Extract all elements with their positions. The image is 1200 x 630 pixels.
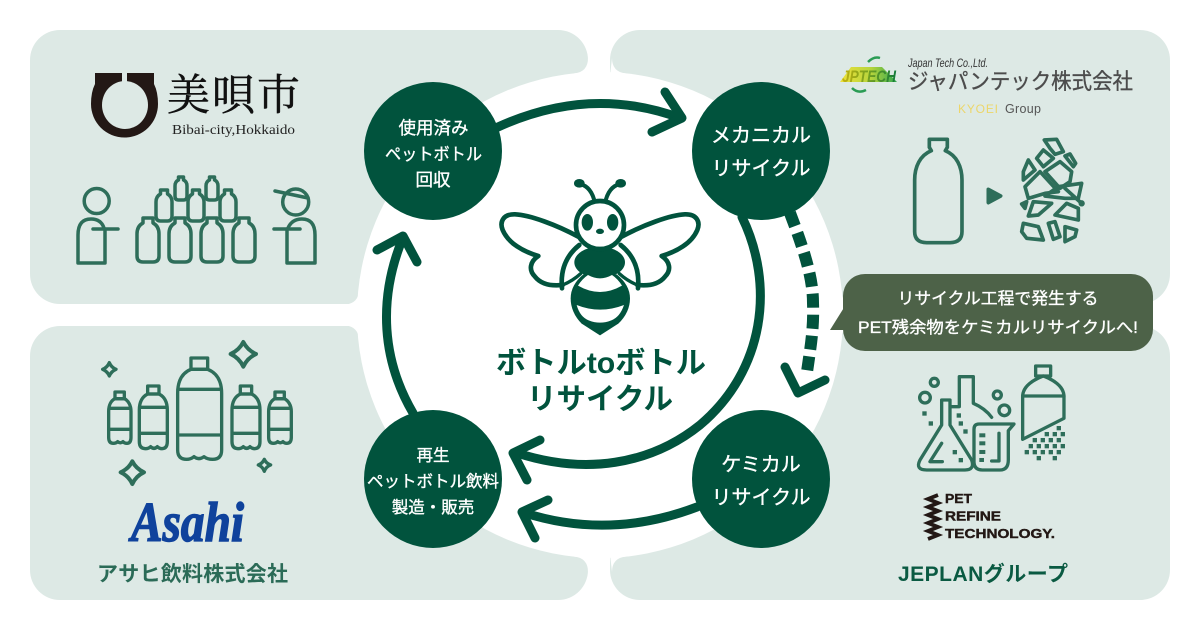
- icon: pellets: [1025, 426, 1065, 460]
- icon: bubbles: [920, 378, 1010, 416]
- icon: collector with cap: [274, 189, 315, 263]
- icon: round flask: [952, 377, 992, 417]
- node: chemical recycling: リサイクル: [712, 486, 810, 509]
- node: chemical recycling: ケミカル: [721, 454, 801, 476]
- icon: beaker: [974, 424, 1014, 470]
- bee thorax and arms: [562, 245, 638, 288]
- node: used bottle collection: [364, 82, 502, 220]
- panel: Bibai city: [30, 30, 588, 304]
- bee antennae: [576, 181, 624, 203]
- callout: PET residue to chemical recycling: リサイクル工程で発生する: [898, 289, 1098, 308]
- arrow: mechanical recycling to resale: [513, 217, 760, 480]
- Japan Tech logo: Japan Tech Co.,Ltd.: [907, 56, 988, 70]
- icon: medium bottle left: [139, 386, 167, 449]
- white central circle: [346, 58, 854, 572]
- company name: Asahi Soft Drinks: アサヒ飲料株式会社: [97, 563, 288, 586]
- icon: small bottle right: [269, 392, 291, 443]
- node: recycled bottle manufacture and sale: 製造・販売: [392, 498, 474, 517]
- Japan Tech logo: [840, 56, 1133, 116]
- arrow: chemical recycling to resale: [522, 500, 697, 538]
- icon: dots in flasks: [922, 411, 985, 462]
- Bibai city logo: 美唄市: [167, 62, 300, 123]
- icon: bottle: [915, 139, 962, 243]
- Japan Tech logo: Group: [1005, 102, 1041, 116]
- Asahi logo: Asahi: [128, 492, 244, 554]
- node: used bottle collection: 回収: [416, 170, 451, 190]
- icon: bottle turning to pellets: [1023, 366, 1064, 439]
- arrow: dashed to chemical recycling: [785, 213, 825, 393]
- Japan Tech logo: ジャパンテック株式会社: [908, 69, 1133, 94]
- icon: bottle to flakes: [915, 139, 1083, 243]
- icon: people collecting bottles: [78, 177, 315, 263]
- bee head: [576, 201, 624, 249]
- Bibai city logo: Bibai-city,Hokkaido: [172, 122, 295, 137]
- node: mechanical recycling: [692, 82, 830, 220]
- icon: small bottle left: [109, 392, 131, 443]
- node: mechanical recycling: リサイクル: [712, 157, 810, 180]
- panel: Japan Tech: [610, 30, 1170, 304]
- icon: collected bottles: [137, 177, 255, 262]
- node: recycled bottle manufacture and sale: [364, 410, 502, 548]
- icon: sparkling new bottles: [103, 342, 291, 484]
- node: recycled bottle manufacture and sale: 再生: [416, 446, 450, 465]
- icon: triangle arrow: [988, 189, 1001, 203]
- node: used bottle collection: ペットボトル: [385, 145, 482, 164]
- node: mechanical recycling: メカニカル: [711, 125, 811, 147]
- icon: sparkles: [103, 342, 271, 484]
- company name: JEPLAN group: JEPLANグループ: [898, 562, 1068, 586]
- bee abdomen: [571, 274, 630, 335]
- arrow: resale to collection: [377, 236, 417, 413]
- PET Refine Technology logo: [928, 492, 1055, 541]
- callout: PET residue to chemical recycling: [830, 274, 1153, 351]
- panel: JEPLAN group: [610, 326, 1170, 600]
- icon: large bottle: [178, 358, 222, 459]
- node: recycled bottle manufacture and sale: ペットボトル飲料: [367, 472, 499, 491]
- Japan Tech logo: JPTECH: [842, 67, 897, 86]
- center title: [496, 347, 706, 416]
- arrow: collection to mechanical recycling: [498, 92, 682, 132]
- PET Refine Technology logo: REFINE: [945, 510, 1001, 524]
- PET Refine Technology logo: TECHNOLOGY.: [945, 527, 1055, 541]
- panel: Asahi Soft Drinks: [30, 326, 588, 600]
- PET Refine Technology logo: PET: [945, 492, 972, 506]
- icon: chemical recycling lab: [918, 366, 1065, 470]
- icon: erlenmeyer flask: [918, 400, 972, 470]
- node: used bottle collection: 使用済み: [398, 118, 468, 138]
- icon: resident: [78, 188, 118, 263]
- callout: PET residue to chemical recycling: PET残余物をケミカルリサイクルへ!: [858, 318, 1138, 337]
- bee wings: [502, 214, 698, 285]
- icon: bee mascot: [502, 181, 698, 335]
- icon: plastic flakes: [1022, 139, 1083, 242]
- center title: リサイクル: [527, 383, 673, 416]
- node: chemical recycling: [692, 410, 830, 548]
- Bibai city logo: [91, 62, 300, 138]
- icon: medium bottle right: [232, 386, 260, 449]
- center title: ボトルtoボトル: [496, 347, 706, 380]
- Japan Tech logo: KYOEI: [958, 102, 998, 116]
